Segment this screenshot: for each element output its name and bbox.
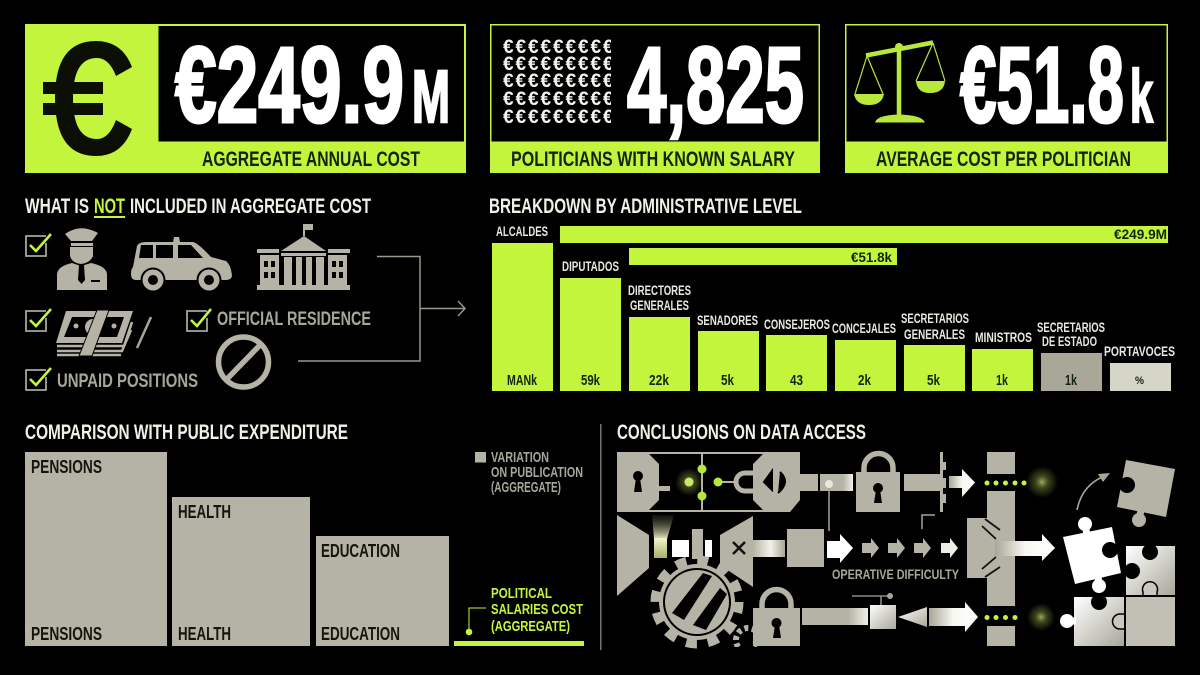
block: pensions (25, 452, 167, 646)
bar names: CONSEJEROS (764, 317, 830, 332)
heading: what is not included: NOT (94, 195, 125, 218)
icon: large euro sign (43, 41, 132, 156)
legend: variation on publication: VARIATION (491, 449, 549, 466)
diagram: junction with arrow (967, 518, 1055, 578)
bar names: CONCEJALES (832, 321, 896, 336)
block: education (316, 536, 449, 646)
legend: political salaries cost (454, 585, 584, 646)
heading: breakdown: BREAKDOWN BY ADMINISTRATIVE LEVEL (489, 195, 802, 218)
bar names: ALCALDES (496, 224, 548, 239)
heading: conclusions: CONCLUSIONS ON DATA ACCESS (617, 421, 866, 444)
icon: loose puzzle piece (1117, 460, 1175, 527)
icon: grid of euro signs: €€€€€€€€€ (503, 71, 614, 92)
icon: grid of euro signs: €€€€€€€€€ (503, 89, 614, 110)
panel: what is not included (25, 195, 465, 392)
panel: breakdown by administrative level (489, 195, 1175, 391)
arrow: curved to puzzle piece (1077, 473, 1110, 510)
icon: stack of money (56, 310, 133, 356)
value: 51.8k: k (1130, 55, 1153, 138)
arrow: connector to breakdown (298, 256, 465, 361)
bar names: GENERALES (630, 298, 689, 313)
heading: comparison: COMPARISON WITH PUBLIC EXPENDITURE (25, 421, 348, 444)
icon: grid of euro signs: €€€€€€€€€ (503, 37, 614, 58)
panel: comparison with public expenditure (25, 421, 584, 646)
label: aggregate annual cost: AGGREGATE ANNUAL COST (202, 148, 420, 171)
diagram: bottom row lock and arrows (753, 590, 978, 646)
value: 4,825: 4,825 (627, 24, 804, 145)
icon: grid of euro signs: €€€€€€€€€ (503, 107, 614, 128)
bar values: 43 (790, 372, 803, 389)
value: 249.9M: €249.9 (175, 24, 404, 145)
bar values: 2k (858, 372, 872, 389)
bar values: MANk (507, 372, 537, 389)
legend: political salaries cost: SALARIES COST (491, 601, 583, 618)
bar: average 51.8k: €51.8k (851, 249, 892, 265)
arrow: middle row chain (753, 515, 958, 567)
block: health (172, 497, 310, 646)
bar: average 51.8k (629, 248, 897, 265)
bar values (507, 372, 1144, 389)
block: education: EDUCATION (321, 624, 400, 644)
block: health: HEALTH (178, 502, 231, 522)
icon: prohibited sign (218, 337, 268, 387)
icon: chauffeur (57, 228, 107, 290)
icon: white puzzle piece (1063, 517, 1121, 593)
bar names: DE ESTADO (1042, 334, 1097, 349)
icon: grid of euro signs: €€€€€€€€€ (503, 54, 614, 75)
heading: what is not included: WHAT IS (25, 195, 89, 218)
bar names: GENERALES (904, 327, 965, 342)
bar names: SECRETARIOS (1037, 320, 1105, 335)
icon: government building (257, 224, 350, 290)
label: politicians with known salary: POLITICIANS WITH KNOWN SALARY (511, 148, 795, 171)
icon: grid of euro signs (503, 40, 611, 123)
bar values: 1k (996, 372, 1008, 389)
block: health: HEALTH (178, 624, 231, 644)
block: education: EDUCATION (321, 541, 400, 561)
bar names: MINISTROS (975, 330, 1032, 345)
label: official residence: OFFICIAL RESIDENCE (217, 309, 371, 330)
legend: political salaries cost: (AGGREGATE) (491, 618, 570, 635)
legend: variation on publication: (AGGREGATE) (491, 479, 561, 496)
panel: average cost per politician (845, 24, 1168, 173)
checkboxes (26, 234, 211, 390)
bar names (496, 224, 1175, 359)
bar names: SECRETARIOS (901, 311, 969, 326)
bar values: 22k (649, 372, 670, 389)
diagram: top row lock mechanism (617, 452, 853, 531)
diagram: funnel and gear (617, 515, 765, 667)
value: 249.9M: M (412, 55, 450, 138)
bar names: DIRECTORES (628, 283, 691, 298)
arrow: top row to column (904, 452, 975, 512)
bar values: 5k (721, 372, 735, 389)
block: pensions: PENSIONS (31, 457, 102, 477)
bar names: DIPUTADOS (562, 259, 619, 274)
heading: what is not included: INCLUDED IN AGGREGATE COST (130, 195, 371, 218)
bar values: 5k (927, 372, 941, 389)
legend: political salaries cost: POLITICAL (491, 585, 552, 602)
block: pensions: PENSIONS (31, 624, 102, 644)
bar names: SENADORES (697, 313, 758, 328)
bar: total 249.9M: €249.9M (1114, 226, 1167, 242)
bar values: 59k (581, 372, 600, 389)
legend: variation on publication: ON PUBLICATION (491, 464, 583, 481)
label: unpaid positions: UNPAID POSITIONS (57, 371, 198, 392)
bar names: PORTAVOCES (1104, 344, 1175, 359)
bar values: % (1135, 375, 1144, 387)
heading: what is not included (25, 195, 371, 218)
diagram: vertical column with dots (984, 452, 1058, 646)
icon: slash (137, 317, 151, 348)
label: operative difficulty: OPERATIVE DIFFICULTY (832, 566, 960, 582)
bar: total 249.9M (560, 226, 1168, 243)
icon: scales (854, 42, 945, 122)
icon: assembled puzzle pieces (1060, 544, 1175, 646)
panel: conclusions on data access (617, 421, 1175, 667)
icon: padlock top (856, 454, 900, 512)
bar chart: levels (492, 243, 1171, 391)
icon: car (131, 237, 232, 292)
panel: aggregate annual cost (25, 24, 466, 173)
bar values: 1k (1065, 372, 1077, 389)
panel: politicians with known salary (490, 24, 820, 173)
legend: variation on publication (475, 449, 583, 496)
